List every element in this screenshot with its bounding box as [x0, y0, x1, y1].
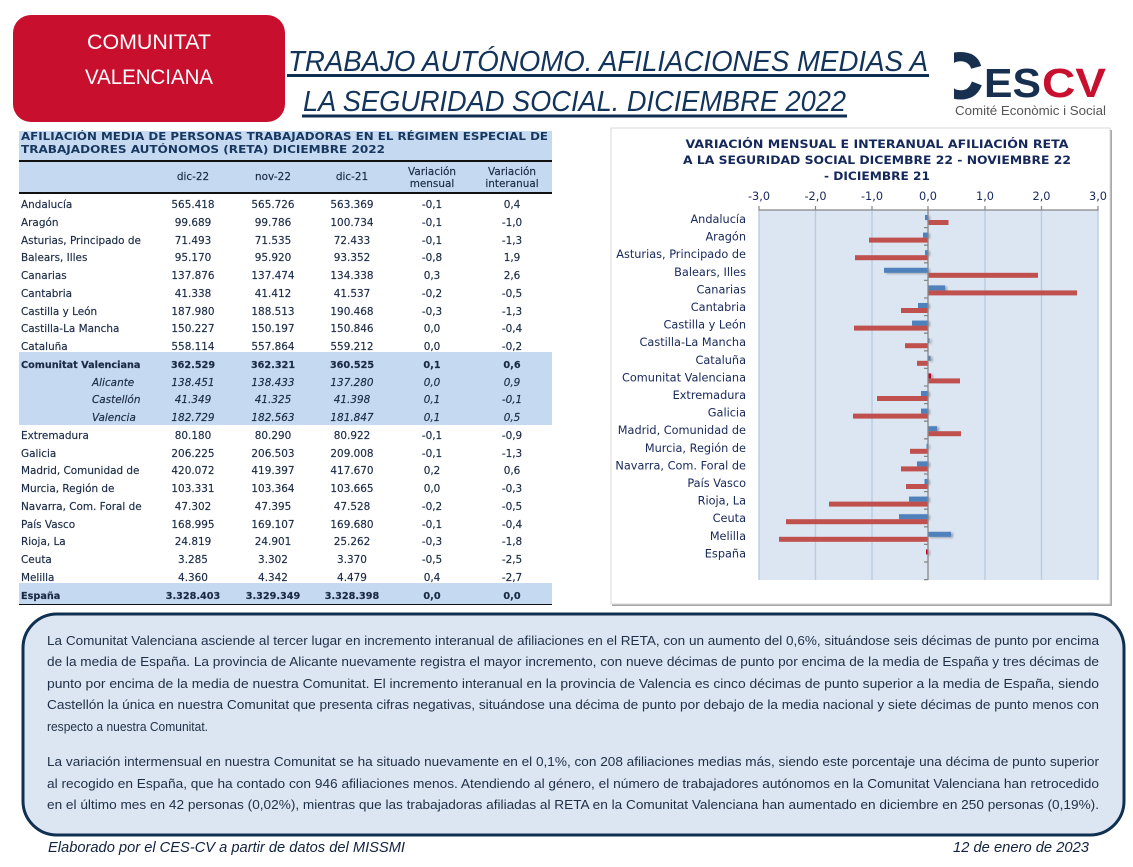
row: Valencia: 181.847	[330, 412, 374, 424]
row: Ceuta: 3.302	[258, 554, 288, 566]
row: Canarias: Canarias	[21, 270, 67, 282]
paragraph 1: de la media de España. La provincia de Alicante nuevamente registra el mayor incremento, con nueve décimas de punto por encima de la media de España y tres décimas de	[47, 654, 1099, 669]
row: Castilla-La Mancha: -0,4	[502, 323, 523, 335]
row: Ceuta: -2,5	[502, 554, 522, 566]
top axis: -3,0	[748, 190, 770, 203]
row: Extremadura: 80.290	[255, 430, 291, 442]
table header row: Variación	[408, 166, 456, 178]
row: Navarra: 47.302	[175, 501, 211, 513]
chart title: A LA SEGURIDAD SOCIAL DICEMBRE 22 - NOVIEMBRE 22	[683, 153, 1071, 167]
row: Comunitat Valenciana: 0,6	[503, 360, 521, 371]
category labels: Castilla-La Mancha	[640, 336, 746, 349]
row: Cataluña: 557.864	[251, 341, 295, 353]
top axis: 0,0	[919, 190, 937, 203]
logo: CES-CV: C	[936, 40, 982, 112]
row: Madrid: 417.670	[330, 465, 374, 477]
row: Asturias: 71.493	[175, 235, 211, 247]
row: Galicia: -1,3	[502, 448, 522, 460]
row: Canarias: 0,3	[424, 270, 440, 282]
row: Aragón: Aragón	[21, 217, 58, 229]
category labels: Aragón	[705, 231, 746, 244]
row: Navarra: 47.395	[255, 501, 291, 513]
category labels: España	[705, 547, 746, 560]
row: Alicante: 137.280	[330, 377, 374, 389]
row: Alicante: 138.433	[251, 377, 295, 389]
row: Aragón: 100.734	[330, 217, 374, 229]
row: Cataluña: 0,0	[424, 341, 440, 353]
paragraph 2: en el último mes en 42 personas (0,02%), mientras que las trabajadoras afiliadas al RETA en la Comunitat Valenciana han aumentado en diciembre en 250 personas (0,19%).	[47, 797, 1099, 812]
row: Ceuta: 3.370	[337, 554, 367, 566]
row: Galicia: -0,1	[422, 448, 442, 460]
row: Castellón: -0,1	[502, 394, 522, 406]
category labels: Extremadura	[673, 389, 746, 402]
row: Comunitat Valenciana: 362.321	[251, 360, 295, 371]
row: Alicante: 0,0	[424, 377, 441, 389]
row: Navarra: -0,2	[422, 501, 442, 513]
category labels: Madrid, Comunidad de	[618, 424, 746, 437]
chart title	[683, 136, 1071, 183]
row: Valencia: 0,1	[424, 412, 440, 424]
row: España: 0,0	[503, 591, 521, 602]
category labels: Balears, Illes	[674, 266, 746, 279]
logo: CES-CV: ES	[984, 60, 1041, 106]
row: Navarra: -0,5	[502, 501, 522, 513]
paragraph 1	[47, 633, 1100, 734]
row: Cataluña: Cataluña	[21, 341, 68, 353]
row: Castilla y León: 188.513	[251, 306, 295, 318]
row: Murcia	[21, 483, 522, 495]
top axis: 2,0	[1033, 190, 1050, 203]
row: Cataluña: -0,2	[502, 341, 522, 353]
row: Rioja: 24.819	[175, 536, 211, 548]
bars: variación mensual	[884, 215, 951, 554]
row: Asturias: 72.433	[334, 235, 370, 247]
category labels: Canarias	[696, 283, 746, 296]
row: Extremadura: 80.922	[334, 430, 370, 442]
row: Castellón	[92, 394, 522, 406]
row: Valencia: 182.729	[171, 412, 215, 424]
row: Canarias: 137.876	[171, 270, 215, 282]
row: Comunitat Valenciana: Comunitat Valenciana	[21, 360, 140, 371]
row: Castilla-La Mancha: Castilla-La Mancha	[21, 323, 119, 335]
row: Madrid	[21, 465, 520, 477]
row: Asturias: -0,1	[422, 235, 442, 247]
row: Castilla-La Mancha: 150.846	[330, 323, 374, 335]
row: Galicia: 206.503	[251, 448, 295, 460]
table heading	[21, 130, 548, 156]
paragraph 2: La variación intermensual en nuestra Comunitat se ha situado nuevamente en el 0,1%, con 208 afiliaciones medias más, siendo este porcentaje una décima de punto superior	[47, 754, 1100, 769]
paragraph 1: punto por encima de la media de nuestra Comunitat. El incremento interanual en la provincia de Valencia es cinco décimas de punto superior a la media de España, siendo	[47, 676, 1099, 691]
category labels: Ceuta	[713, 512, 746, 525]
top axis: -2,0	[804, 190, 827, 203]
row: Castellón: 41.398	[334, 394, 371, 406]
row: Canarias: 137.474	[251, 270, 295, 282]
row: Madrid: 419.397	[251, 465, 295, 477]
row: Navarra: 47.528	[334, 501, 370, 513]
row: Rioja: -1,8	[502, 536, 522, 548]
row: Extremadura: -0,1	[422, 430, 442, 442]
category labels: Castilla y León	[664, 319, 746, 332]
category labels: Melilla	[710, 530, 746, 543]
plot area	[759, 210, 1098, 580]
paragraph 1: Castellón la única en nuestra Comunitat que presenta cifras negativas, situándose una décima de punto por debajo de la media nacional y siete décimas de punto menos con	[47, 697, 1099, 712]
table header row: Variación	[488, 166, 536, 178]
chart title: VARIACIÓN MENSUAL E INTERANUAL AFILIACIÓN RETA	[686, 136, 1069, 151]
title: LA SEGURIDAD SOCIAL. DICIEMBRE 2022	[303, 86, 846, 118]
row: Balears	[21, 252, 520, 264]
top axis: -1,0	[861, 190, 883, 203]
row: País Vasco	[21, 519, 523, 531]
row: Valencia	[92, 412, 521, 424]
row: Murcia: -0,3	[502, 483, 522, 495]
row: Canarias	[21, 270, 520, 282]
row: Aragón: 99.786	[255, 217, 291, 229]
row: Murcia: 103.665	[330, 483, 374, 495]
row: Castilla y León	[21, 306, 522, 318]
row: Ceuta: 3.285	[178, 554, 208, 566]
chart title: - DICIEMBRE 21	[824, 169, 930, 183]
row: España: 0,0	[423, 591, 441, 602]
row: Melilla: 4.360	[178, 572, 208, 584]
row: Asturias	[21, 235, 522, 247]
row: Castellón: Castellón	[92, 394, 140, 406]
row: Castilla-La Mancha	[21, 323, 523, 335]
paragraph 2	[47, 754, 1100, 812]
row: Rioja: 24.901	[255, 536, 291, 548]
row: Canarias: 134.338	[330, 270, 374, 282]
row: Valencia: Valencia	[92, 412, 136, 424]
row: Comunitat Valenciana: 0,1	[423, 360, 441, 371]
row: Castellón: 0,1	[424, 394, 440, 406]
table header row: interanual	[485, 178, 539, 190]
row: Valencia: 0,5	[504, 412, 521, 424]
row: Andalucía: -0,1	[422, 199, 442, 211]
row: Ceuta: Ceuta	[21, 554, 52, 566]
row: Andalucía	[21, 199, 521, 211]
row: Galicia: 206.225	[171, 448, 215, 460]
category labels: Murcia, Región de	[645, 442, 746, 455]
region badge: COMUNITAT	[87, 31, 211, 54]
row: Rioja: 25.262	[334, 536, 370, 548]
row: Cataluña	[21, 341, 522, 353]
row: Andalucía: Andalucía	[21, 199, 72, 211]
category labels: Navarra, Com. Foral de	[615, 459, 746, 472]
paragraph 2: al recogido en España, que ha contado con 946 afiliaciones menos. Atendiendo al género, el número de trabajadores autónomos en la Comunitat Valenciana han retrocedido	[47, 776, 1099, 791]
row: País Vasco: País Vasco	[21, 519, 75, 531]
row: Murcia: Murcia, Región de	[21, 483, 114, 495]
vertical axis	[924, 210, 928, 580]
row: Alicante: Alicante	[91, 377, 134, 389]
footer: date: 12 de enero de 2023	[953, 840, 1089, 856]
row: Balears: 95.920	[255, 252, 291, 264]
title	[287, 45, 929, 118]
row: Navarra: Navarra, Com. Foral de	[21, 501, 142, 513]
row: Balears: Balears, Illes	[21, 252, 87, 264]
row: Balears: 95.170	[175, 252, 211, 264]
category labels: Rioja, La	[698, 495, 746, 508]
row: Galicia: 209.008	[330, 448, 374, 460]
row: Melilla: -2,7	[502, 572, 522, 584]
bars: variación interanual	[779, 220, 1077, 542]
row: Asturias: Asturias, Principado de	[21, 235, 141, 247]
top axis: 3,0	[1089, 190, 1107, 203]
row: Castilla y León: Castilla y León	[21, 306, 97, 318]
row: Murcia: 0,0	[424, 483, 440, 495]
row: Comunitat Valenciana: 360.525	[330, 360, 374, 371]
row: Navarra	[21, 501, 522, 513]
row: Melilla	[21, 572, 522, 584]
row: Alicante: 138.451	[171, 377, 215, 389]
row: Aragón: 99.689	[175, 217, 211, 229]
row: Melilla: 4.342	[258, 572, 288, 584]
panel: bar chart	[611, 128, 1112, 606]
row: Extremadura: Extremadura	[21, 430, 89, 442]
row: Madrid: 0,6	[504, 465, 520, 477]
row: Cantabria: Cantabria	[21, 288, 72, 300]
row: Murcia: 103.364	[251, 483, 295, 495]
table header row: mensual	[410, 178, 454, 190]
row: Alicante: 0,9	[504, 377, 520, 389]
row: Castellón: 41.349	[175, 394, 211, 406]
top axis	[748, 190, 1107, 210]
category labels	[615, 213, 746, 560]
row: Balears: -0,8	[422, 252, 442, 264]
row: Balears: 93.352	[334, 252, 370, 264]
category labels: País Vasco	[687, 477, 746, 490]
paragraph 1: respecto a nuestra Comunitat.	[47, 719, 208, 734]
row: España: 3.328.403	[166, 591, 220, 602]
row: País Vasco: 168.995	[171, 519, 215, 531]
row: Ceuta	[21, 554, 522, 566]
row: Cantabria	[21, 288, 522, 300]
table header row	[177, 166, 539, 190]
row: Aragón: -1,0	[502, 217, 522, 229]
row: Madrid: 0,2	[424, 465, 440, 477]
row: Cantabria: 41.338	[175, 288, 211, 300]
logo: CES-CV: Comité Econòmic i Social	[955, 104, 1106, 118]
row: Extremadura: 80.180	[175, 430, 211, 442]
row: Andalucía: 0,4	[504, 199, 521, 211]
row: Murcia: 103.331	[171, 483, 215, 495]
row: España: España	[21, 591, 60, 602]
category labels: Comunitat Valenciana	[622, 371, 746, 384]
row: España: 3.329.349	[246, 591, 301, 602]
category labels: Cantabria	[691, 301, 746, 314]
category labels: Cataluña	[695, 354, 746, 367]
row: Cantabria: -0,5	[502, 288, 522, 300]
row: Castilla-La Mancha: 150.227	[171, 323, 215, 335]
row: Balears: 1,9	[504, 252, 520, 264]
row: Castilla y León: -1,3	[502, 306, 522, 318]
row: País Vasco: 169.680	[330, 519, 374, 531]
row: País Vasco: -0,1	[422, 519, 442, 531]
region badge: VALENCIANA	[85, 66, 213, 89]
row: Andalucía: 565.726	[251, 199, 295, 211]
row: Castilla-La Mancha: 150.197	[251, 323, 295, 335]
category labels: Andalucía	[690, 213, 746, 226]
row: Castilla y León: 187.980	[171, 306, 215, 318]
row: España	[21, 591, 521, 602]
row: Asturias: 71.535	[255, 235, 291, 247]
row: Ceuta: -0,5	[422, 554, 442, 566]
row: Castilla y León: -0,3	[422, 306, 442, 318]
row: Andalucía: 565.418	[171, 199, 215, 211]
category labels: Asturias, Principado de	[616, 248, 746, 261]
row: Andalucía: 563.369	[330, 199, 374, 211]
row: Comunitat Valenciana: 362.529	[171, 360, 215, 371]
row: Aragón	[21, 217, 522, 229]
row: Cantabria: -0,2	[422, 288, 442, 300]
row: País Vasco: -0,4	[502, 519, 523, 531]
row: Rioja	[21, 536, 522, 548]
row: Extremadura	[21, 430, 522, 442]
table heading: TRABAJADORES AUTÓNOMOS (RETA) DICIEMBRE 2022	[21, 143, 385, 156]
table heading: AFILIACIÓN MEDIA DE PERSONAS TRABAJADORAS EN EL RÉGIMEN ESPECIAL DE	[21, 130, 548, 143]
row: Canarias: 2,6	[504, 270, 520, 282]
row: País Vasco: 169.107	[251, 519, 295, 531]
row: España: 3.328.398	[325, 591, 380, 602]
row: Rioja: Rioja, La	[21, 536, 66, 548]
row: Galicia	[21, 448, 522, 460]
row: Valencia: 182.563	[251, 412, 295, 424]
row: Castellón: 41.325	[255, 394, 292, 406]
row: Cataluña: 558.114	[171, 341, 215, 353]
row: Extremadura: -0,9	[502, 430, 522, 442]
row: Castilla y León: 190.468	[330, 306, 374, 318]
row: Cantabria: 41.537	[334, 288, 370, 300]
title: TRABAJO AUTÓNOMO. AFILIACIONES MEDIAS A	[288, 45, 928, 78]
row: Aragón: -0,1	[422, 217, 442, 229]
table header row: dic-21	[336, 171, 368, 183]
panel: commentary text	[23, 614, 1124, 835]
row: Cantabria: 41.412	[255, 288, 291, 300]
row: Madrid: 420.072	[171, 465, 215, 477]
row: Castilla-La Mancha: 0,0	[424, 323, 440, 335]
footer: source: Elaborado por el CES-CV a partir de datos del MISSMI	[48, 840, 405, 856]
logo: CES-CV: CV	[1042, 60, 1107, 106]
row: Madrid: Madrid, Comunidad de	[21, 465, 139, 477]
region badge	[13, 15, 285, 122]
row: Melilla: 0,4	[424, 572, 441, 584]
row: Galicia: Galicia	[21, 448, 56, 460]
top axis: 1,0	[976, 190, 994, 203]
table header row: nov-22	[255, 171, 291, 183]
table header row: dic-22	[177, 171, 209, 183]
row: Comunitat Valenciana	[21, 360, 521, 371]
row: Alicante	[91, 377, 520, 389]
row: Asturias: -1,3	[502, 235, 522, 247]
paragraph 1: La Comunitat Valenciana asciende al tercer lugar en incremento interanual de afiliaciones en el RETA, con un aumento del 0,6%, situándose seis décimas de punto por encima	[47, 633, 1100, 648]
category labels: Galicia	[708, 407, 746, 420]
row: Melilla: Melilla	[21, 572, 54, 584]
row: Rioja: -0,3	[422, 536, 442, 548]
row: Melilla: 4.479	[337, 572, 367, 584]
table: afiliación media	[19, 130, 552, 605]
row: Cataluña: 559.212	[330, 341, 374, 353]
logo: CES-CV	[954, 52, 1106, 115]
